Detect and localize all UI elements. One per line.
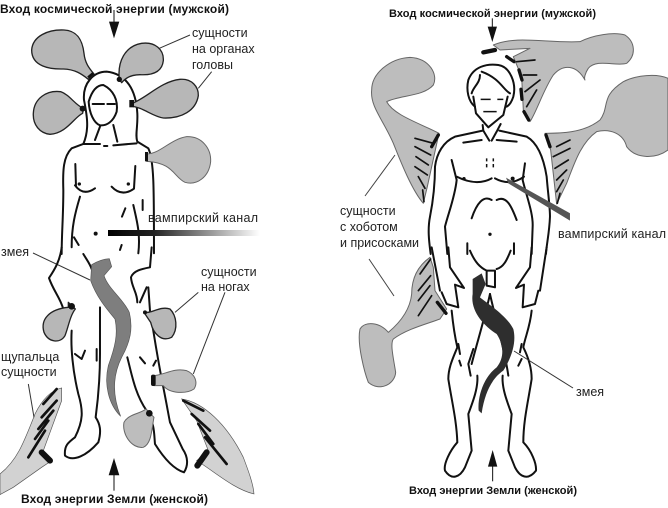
- label: entities on legs: сущности: [201, 265, 257, 279]
- label: proboscis entities: сущности: [340, 204, 396, 218]
- vampire channel bar: [108, 230, 260, 236]
- label: snake: змея: [576, 385, 604, 399]
- arrow: up into feet: [109, 458, 119, 491]
- arrow: up into feet: [488, 450, 497, 481]
- entity: top right: [493, 34, 633, 122]
- male lower body outline: [432, 247, 547, 477]
- entity: right: [545, 75, 668, 204]
- male upper body outline: [429, 65, 550, 254]
- label: entities on head organs: на органах: [192, 42, 255, 56]
- vampire channel wedge: [506, 178, 570, 221]
- title: cosmic energy input, female: Вход космической энергии (мужской): [0, 2, 229, 16]
- entity on head: top centre: [119, 43, 163, 83]
- label: vampire channel: вампирский канал: [558, 227, 666, 241]
- snake: [472, 273, 514, 413]
- label: entity tentacles: щупальца: [1, 350, 59, 364]
- label: entities on head organs: головы: [192, 58, 233, 72]
- entity on head: top left: [32, 30, 94, 79]
- entity on head: left: [33, 91, 83, 134]
- suckers on leg entities: [68, 303, 156, 417]
- suckers on tentacles: [28, 389, 227, 466]
- label: snake: [1, 245, 90, 280]
- snake: [91, 259, 131, 416]
- entity on head: right: [131, 79, 198, 118]
- entity: left: [372, 57, 439, 203]
- label: entities on head organs: [159, 26, 255, 88]
- arrow: down into head: [109, 10, 119, 38]
- label: vampire channel: вампирский канал: [148, 211, 258, 225]
- label: entity tentacles: сущности: [1, 365, 57, 379]
- label: entities on legs: на ногах: [201, 280, 250, 294]
- entity: right thigh: [144, 308, 176, 339]
- female figure diagram: [0, 2, 260, 506]
- entity: knee: [153, 370, 196, 392]
- title: cosmic energy input, male: Вход космической энергии (мужской): [389, 8, 596, 20]
- title: earth energy input, female: Вход энергии Земли (женской): [21, 492, 208, 506]
- entity: foot: [124, 409, 154, 447]
- entity on shoulder: [147, 137, 211, 183]
- entity: lower left: [359, 257, 447, 387]
- male figure diagram: [340, 8, 668, 497]
- label: entities on head organs: сущности: [192, 26, 248, 40]
- female lower body outline: [49, 247, 187, 472]
- title: earth energy input, male: Вход энергии Земли (женской): [409, 485, 577, 497]
- female upper body outline: [62, 72, 154, 254]
- tentacle entity: bottom right: [182, 399, 254, 494]
- label: proboscis entities: с хоботом: [340, 220, 398, 234]
- tentacle entity: bottom left: [0, 388, 62, 495]
- suckers on male entities: [415, 50, 570, 203]
- suckers on head entities: [80, 72, 148, 161]
- entity: left thigh: [43, 302, 75, 341]
- label: proboscis entities: [340, 155, 419, 296]
- label: entities on legs: [175, 265, 257, 374]
- label: proboscis entities: и присосками: [340, 236, 419, 250]
- arrow: down into head: [488, 18, 497, 42]
- label: snake: змея: [1, 245, 29, 259]
- label: snake: [514, 351, 604, 399]
- label: entity tentacles: [1, 350, 59, 417]
